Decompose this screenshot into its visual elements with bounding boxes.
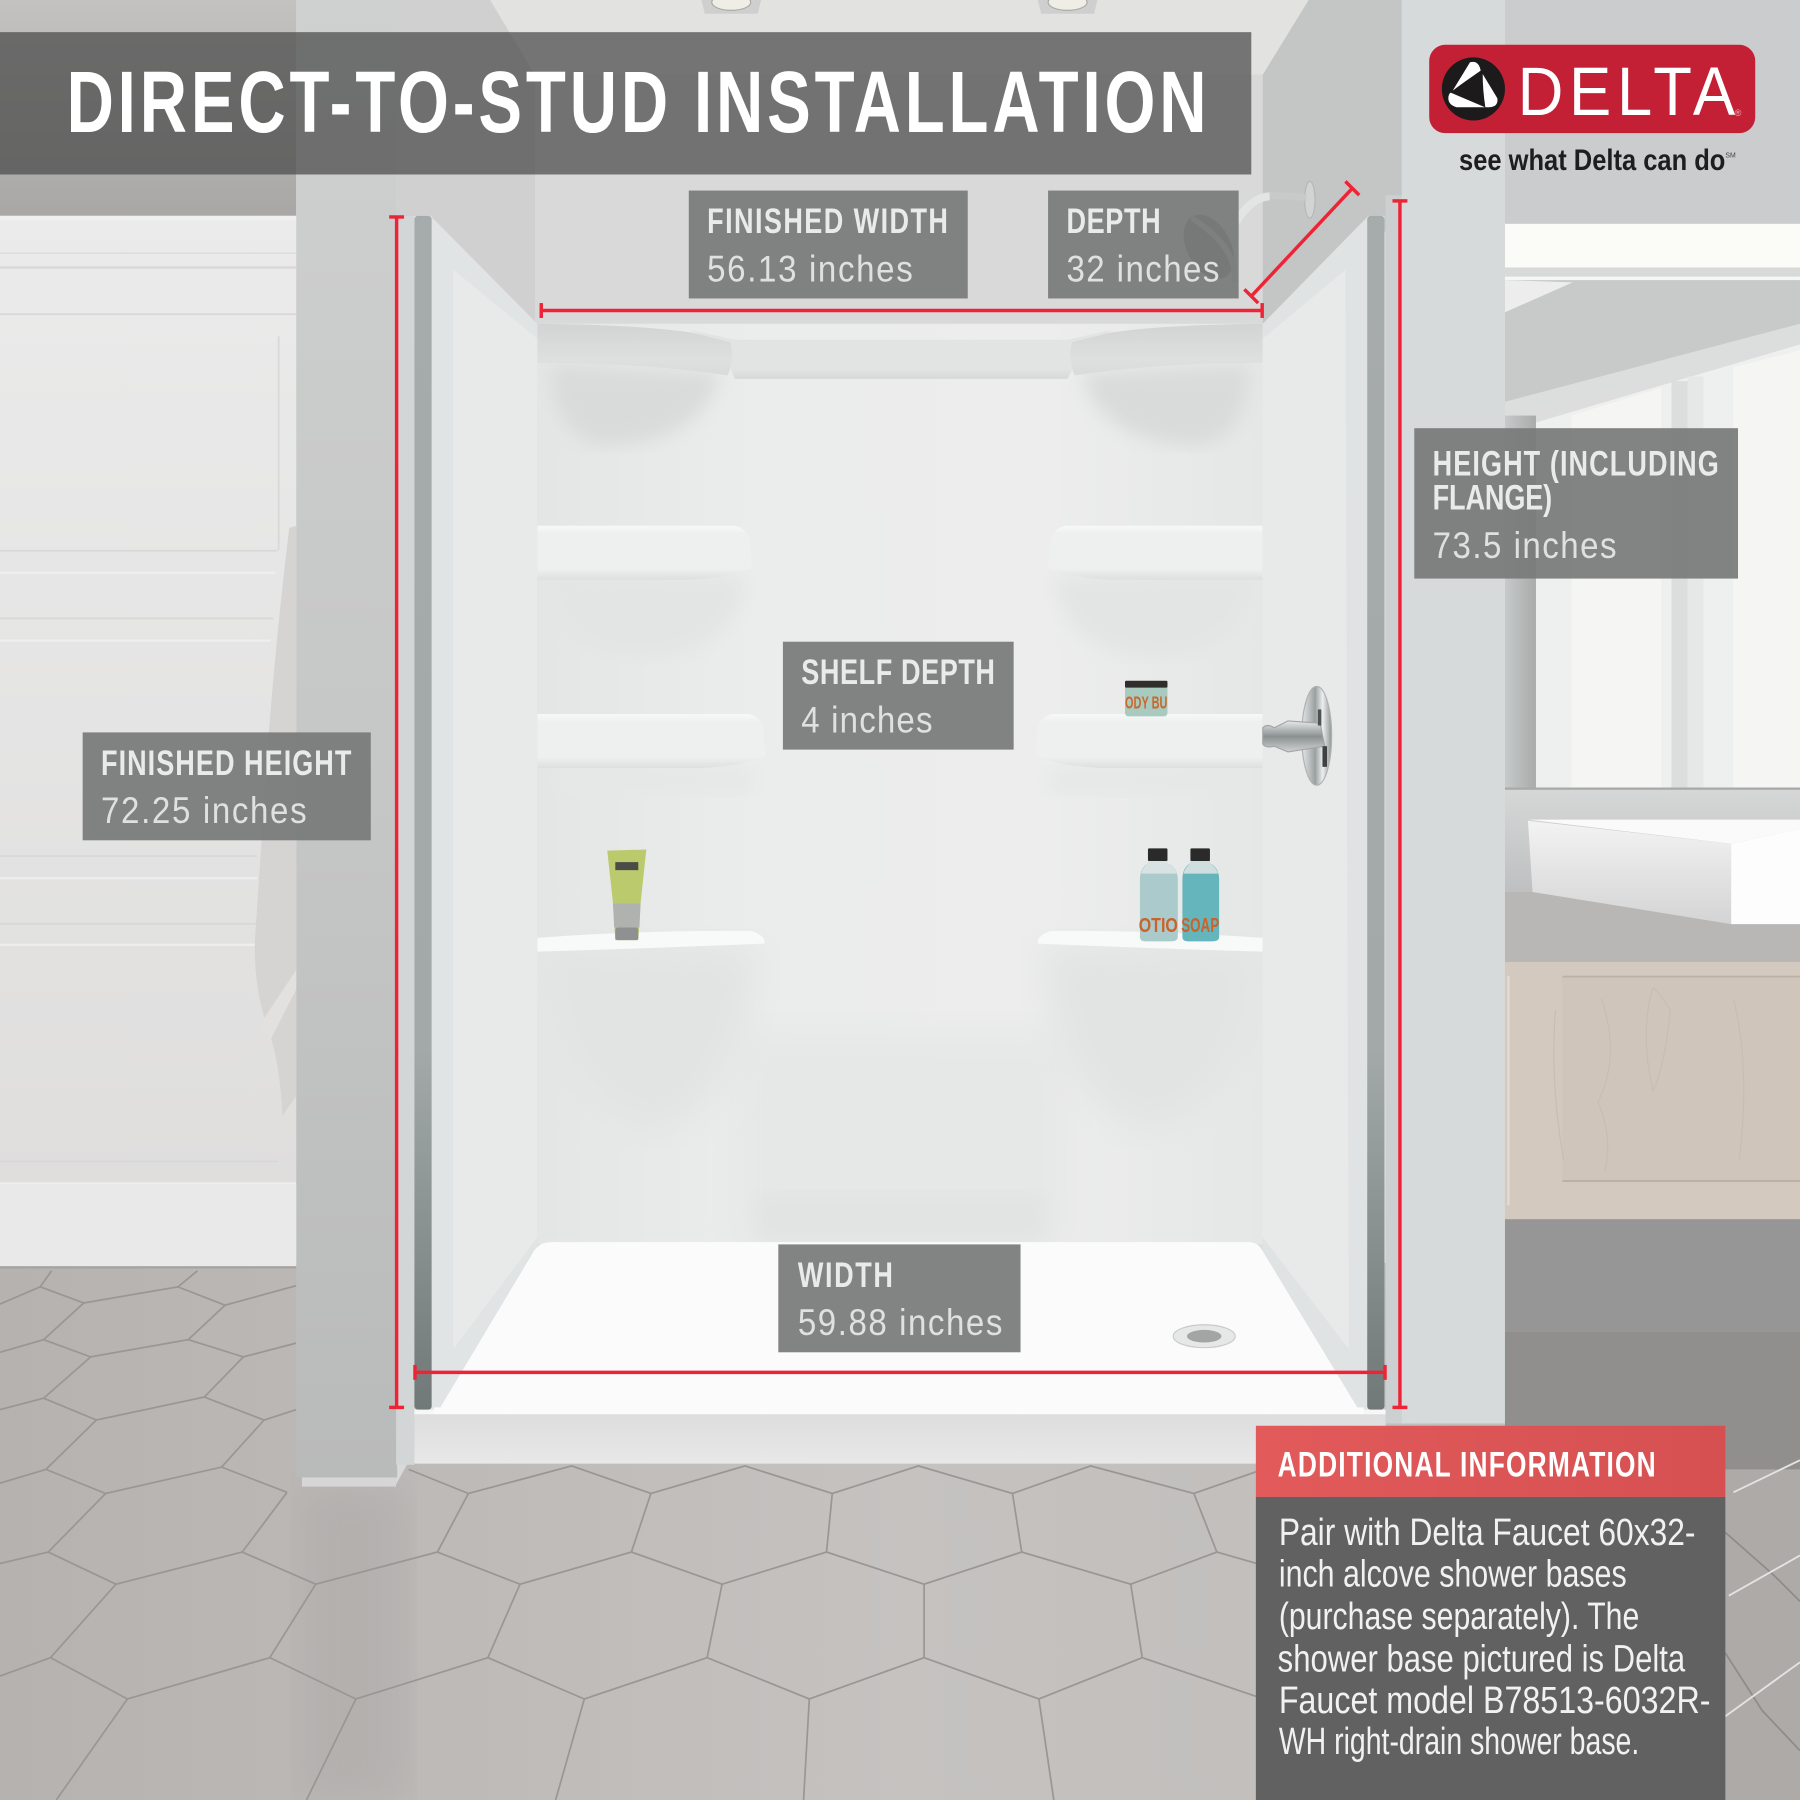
label: depth: 32 inches [1066,249,1219,290]
Delta logo: ® [1735,108,1742,118]
additional information header: ADDITIONAL INFORMATION [1278,1444,1656,1484]
left room wall with panelling [0,216,296,1268]
icon: chrome shower valve [1263,686,1332,785]
shower base with drain [414,1242,1386,1464]
label: shelf depth [783,642,1014,750]
additional information body: inch alcove shower bases [1279,1553,1627,1595]
label: width [778,1244,1021,1352]
logo tagline: SM [1725,152,1736,159]
label: width: WIDTH [798,1254,893,1295]
title banner: DIRECT-TO-STUD INSTALLATION [67,54,1207,151]
label: depth: DEPTH [1066,200,1161,241]
label: finished height: FINISHED HEIGHT [101,742,351,783]
title banner [0,32,1251,174]
label: finished height [83,732,371,840]
label: height including flange: 73.5 inches [1433,525,1617,566]
additional information body: WH right-drain shower base. [1279,1721,1639,1763]
corner shelves, right column [1035,324,1263,952]
Delta logo [1429,45,1755,133]
Delta logo: DELTA [1518,53,1735,130]
label: finished width: 56.13 inches [707,249,913,290]
right room: window, soffit, sink and vanity [1505,0,1800,1800]
left side panel and flange [414,216,537,1423]
hexagon tile floor [0,1263,1800,1800]
shelf item: jar: ODY BU [1125,692,1167,712]
icon: hanging towel [255,526,296,1116]
additional information body: Faucet model B78513-6032R- [1279,1680,1710,1722]
shelf item: lotion bottle: OTIO [1139,914,1178,937]
additional information header [1256,1426,1725,1497]
label: depth [1048,191,1239,298]
dimension line: height including flange [1392,200,1407,1409]
additional information body: shower base pictured is Delta [1278,1638,1686,1680]
corner shelves, left column [537,324,766,952]
recessed ceiling lights [701,0,1097,14]
label: height including flange: FLANGE) [1433,477,1552,518]
label: height including flange [1414,428,1738,579]
additional information body: Pair with Delta Faucet 60x32- [1279,1512,1696,1554]
shelf item: soap bottle: SOAP [1181,914,1219,937]
logo tagline: see what Delta can do [1459,144,1725,177]
label: finished width: FINISHED WIDTH [707,200,948,241]
dimension line: finished height [389,216,404,1409]
shelf item: lotion bottle [1139,848,1178,941]
additional information body: (purchase separately). The [1279,1596,1639,1638]
panel: additional information [1256,1426,1725,1800]
label: finished height: 72.25 inches [101,791,307,831]
icon: shower head and arm [1173,181,1315,287]
shelf item: jar [1125,681,1167,716]
shower back wall panel [537,324,1265,1251]
label: finished width [689,191,968,298]
label: shelf depth: SHELF DEPTH [801,652,995,692]
label: shelf depth: 4 inches [801,700,932,741]
shelf item: green tube [607,849,646,940]
background: room architecture [0,0,1505,1487]
shelf item: soap bottle [1181,848,1219,941]
dimension line: depth [1244,181,1359,303]
label: height including flange: HEIGHT (INCLUDING [1433,443,1719,483]
label: width: 59.88 inches [798,1302,1002,1343]
dimension line: finished width [541,303,1262,318]
additional information body [1256,1497,1725,1800]
dimension line: width [414,1365,1386,1380]
right side panel and flange [1263,216,1384,1423]
